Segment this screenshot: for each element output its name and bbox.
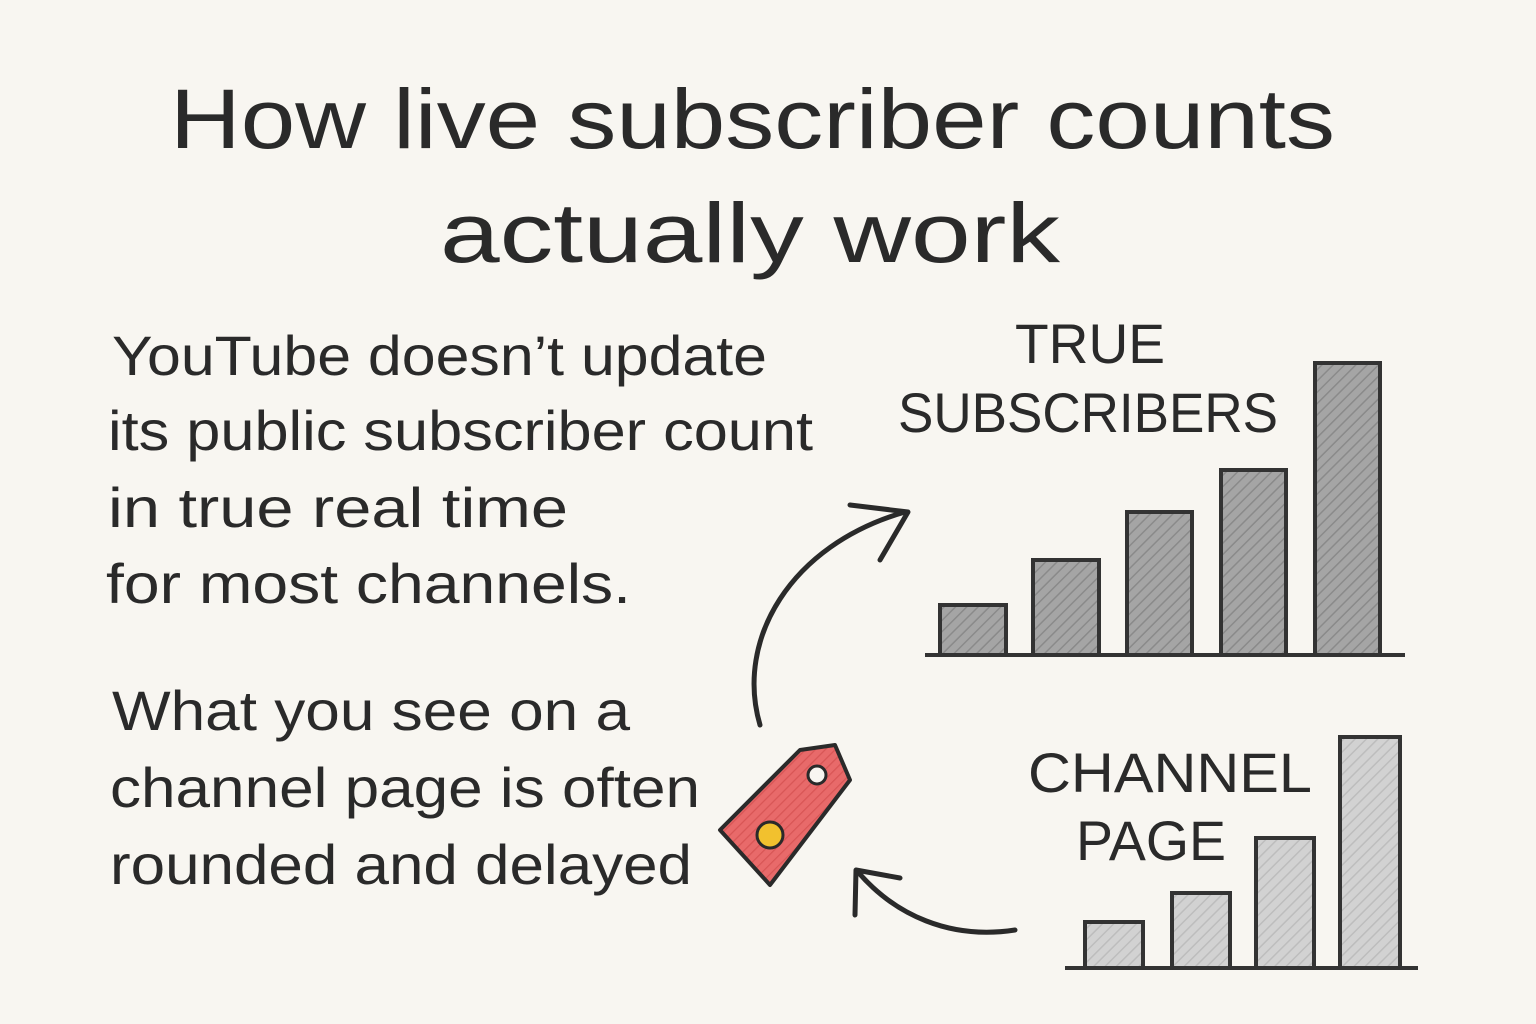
- arrow: up to true subscribers: [754, 505, 908, 725]
- bar chart: true subscribers: [925, 363, 1405, 655]
- label: true subscribers: TRUE: [1015, 312, 1165, 375]
- text block: real time: its public subscriber count: [108, 399, 813, 462]
- label: channel page: [1028, 741, 1312, 872]
- title: actually work: [440, 186, 1061, 280]
- label: channel page: CHANNEL: [1028, 741, 1312, 804]
- text block: rounded and delayed: What you see on a: [112, 679, 631, 742]
- label: true subscribers: [898, 312, 1278, 444]
- text block: real time: in true real time: [108, 476, 568, 539]
- label: channel page: PAGE: [1076, 809, 1226, 872]
- text block: real time: YouTube doesn’t update: [112, 324, 767, 387]
- arrow: from channel page to tag: [855, 870, 1015, 932]
- text block: rounded and delayed: [110, 679, 700, 896]
- text block: real time: [106, 324, 813, 615]
- text block: real time: for most channels.: [106, 552, 631, 615]
- title: [170, 72, 1335, 280]
- text block: rounded and delayed: channel page is often: [110, 756, 700, 819]
- icon: price tag: [720, 745, 850, 885]
- label: true subscribers: SUBSCRIBERS: [898, 381, 1278, 444]
- text block: rounded and delayed: rounded and delayed: [110, 833, 692, 896]
- title: How live subscriber counts: [170, 72, 1335, 166]
- bar chart: channel page: [1065, 737, 1418, 968]
